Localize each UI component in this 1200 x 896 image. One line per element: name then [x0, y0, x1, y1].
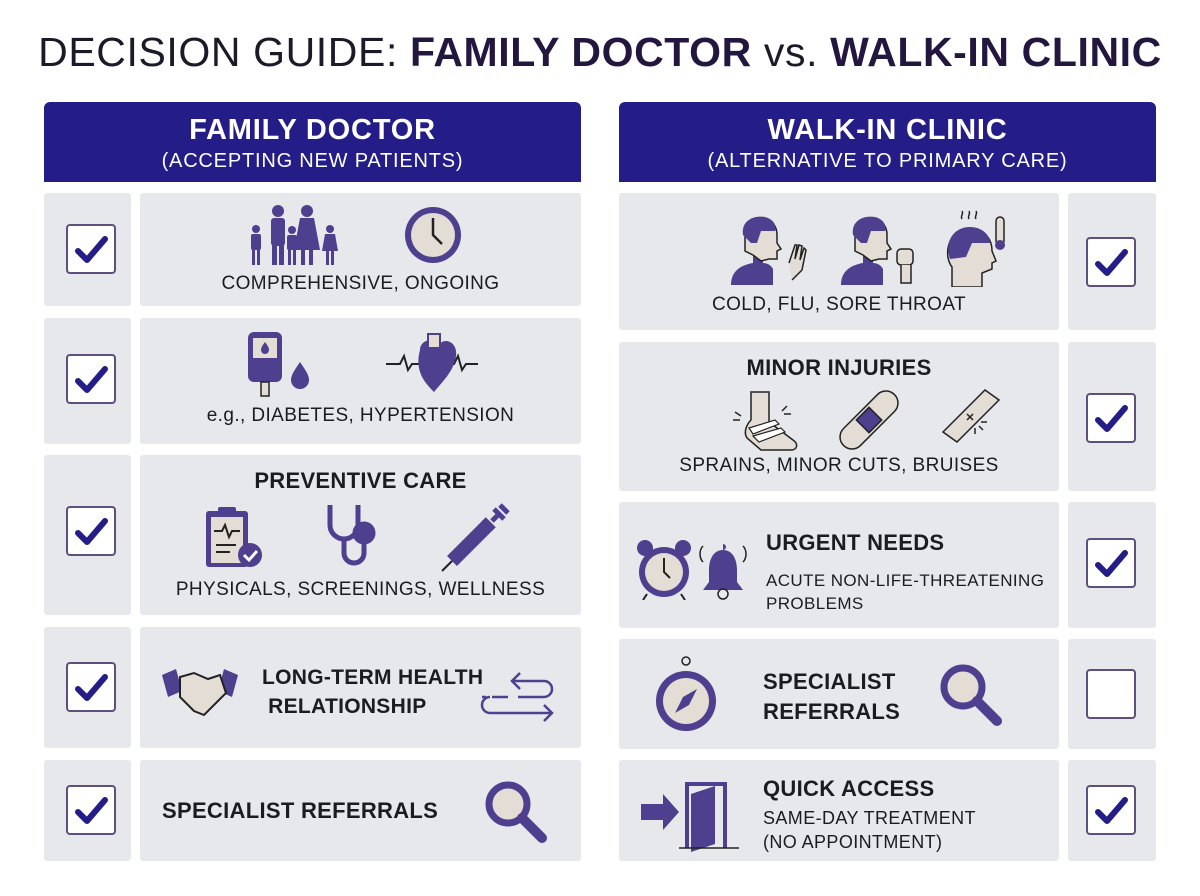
icon: glucose meter [248, 332, 309, 397]
icon: coughing person [731, 216, 807, 285]
icon: compass [656, 656, 716, 731]
right row 4 [619, 639, 1156, 749]
checkbox [66, 224, 116, 274]
icon: magnifier [486, 782, 547, 843]
right row 1 [619, 193, 1156, 330]
icon: bruised arm [942, 389, 1000, 443]
right row 3: PROBLEMS [766, 594, 864, 613]
icon: arrows [480, 672, 554, 722]
left row 2 [44, 318, 581, 444]
checkbox [1086, 393, 1136, 443]
icon: heart [386, 333, 478, 392]
left row 5: SPECIALIST REFERRALS [162, 798, 438, 823]
header: family doctor: (ACCEPTING NEW PATIENTS) [162, 150, 463, 172]
icon: stethoscope [328, 505, 376, 566]
checkbox [1086, 237, 1136, 287]
icon: fever head [946, 210, 1005, 287]
right row 5: QUICK ACCESS [763, 776, 934, 801]
right row 5: SAME-DAY TREATMENT [763, 808, 976, 828]
right row 2: MINOR INJURIES [746, 355, 932, 380]
left row 3: PREVENTIVE CARE [254, 468, 467, 493]
header: walk-in clinic: WALK-IN CLINIC [768, 114, 1007, 146]
checkbox (empty) [1086, 669, 1136, 719]
icon: clock [405, 207, 461, 263]
icon: alarm clock [637, 540, 691, 600]
right row 4: SPECIALIST [763, 669, 896, 694]
icon: clipboard [206, 507, 262, 567]
icon: arrow into door [641, 782, 739, 852]
icon: handshake [162, 669, 238, 716]
right row 1: COLD, FLU, SORE THROAT [712, 294, 966, 315]
right row 2: SPRAINS, MINOR CUTS, BRUISES [679, 455, 999, 476]
left row 4 [44, 627, 581, 748]
right row 5: (NO APPOINTMENT) [763, 832, 942, 852]
right row 4: REFERRALS [763, 699, 900, 724]
icon: person with fist [841, 216, 914, 285]
right row 3 [619, 502, 1156, 628]
header: family doctor [44, 102, 581, 182]
left row 1: COMPREHENSIVE, ONGOING [221, 273, 500, 294]
icon: syringe [441, 503, 510, 572]
checkbox [66, 662, 116, 712]
right row 3: URGENT NEEDS [766, 530, 944, 555]
header: family doctor: FAMILY DOCTOR [189, 114, 436, 146]
left row 4: RELATIONSHIP [268, 695, 427, 718]
header: walk-in clinic [619, 102, 1156, 182]
checkbox [1086, 538, 1136, 588]
icon: bandage [839, 390, 899, 450]
icon: family [251, 205, 338, 265]
icon: magnifier [940, 664, 1002, 726]
icon: sprained foot [733, 391, 798, 451]
checkbox [66, 506, 116, 556]
left row 5 [44, 760, 581, 861]
left row 3: PHYSICALS, SCREENINGS, WELLNESS [176, 579, 545, 600]
checkbox [66, 785, 116, 835]
left row 1 [44, 193, 581, 306]
left row 2: e.g., DIABETES, HYPERTENSION [207, 405, 514, 426]
icon: bell [699, 544, 747, 600]
checkbox [1086, 785, 1136, 835]
right row 2 [619, 342, 1156, 491]
right row 5 [619, 760, 1156, 861]
checkbox [66, 354, 116, 404]
left row 4: LONG-TERM HEALTH [262, 666, 483, 689]
header: walk-in clinic: (ALTERNATIVE TO PRIMARY CARE) [708, 150, 1067, 172]
left row 3 [44, 455, 581, 615]
title: DECISION GUIDE: FAMILY DOCTOR vs. WALK-IN CLINIC [38, 29, 1162, 75]
right row 3: ACUTE NON-LIFE-THREATENING [766, 571, 1044, 590]
